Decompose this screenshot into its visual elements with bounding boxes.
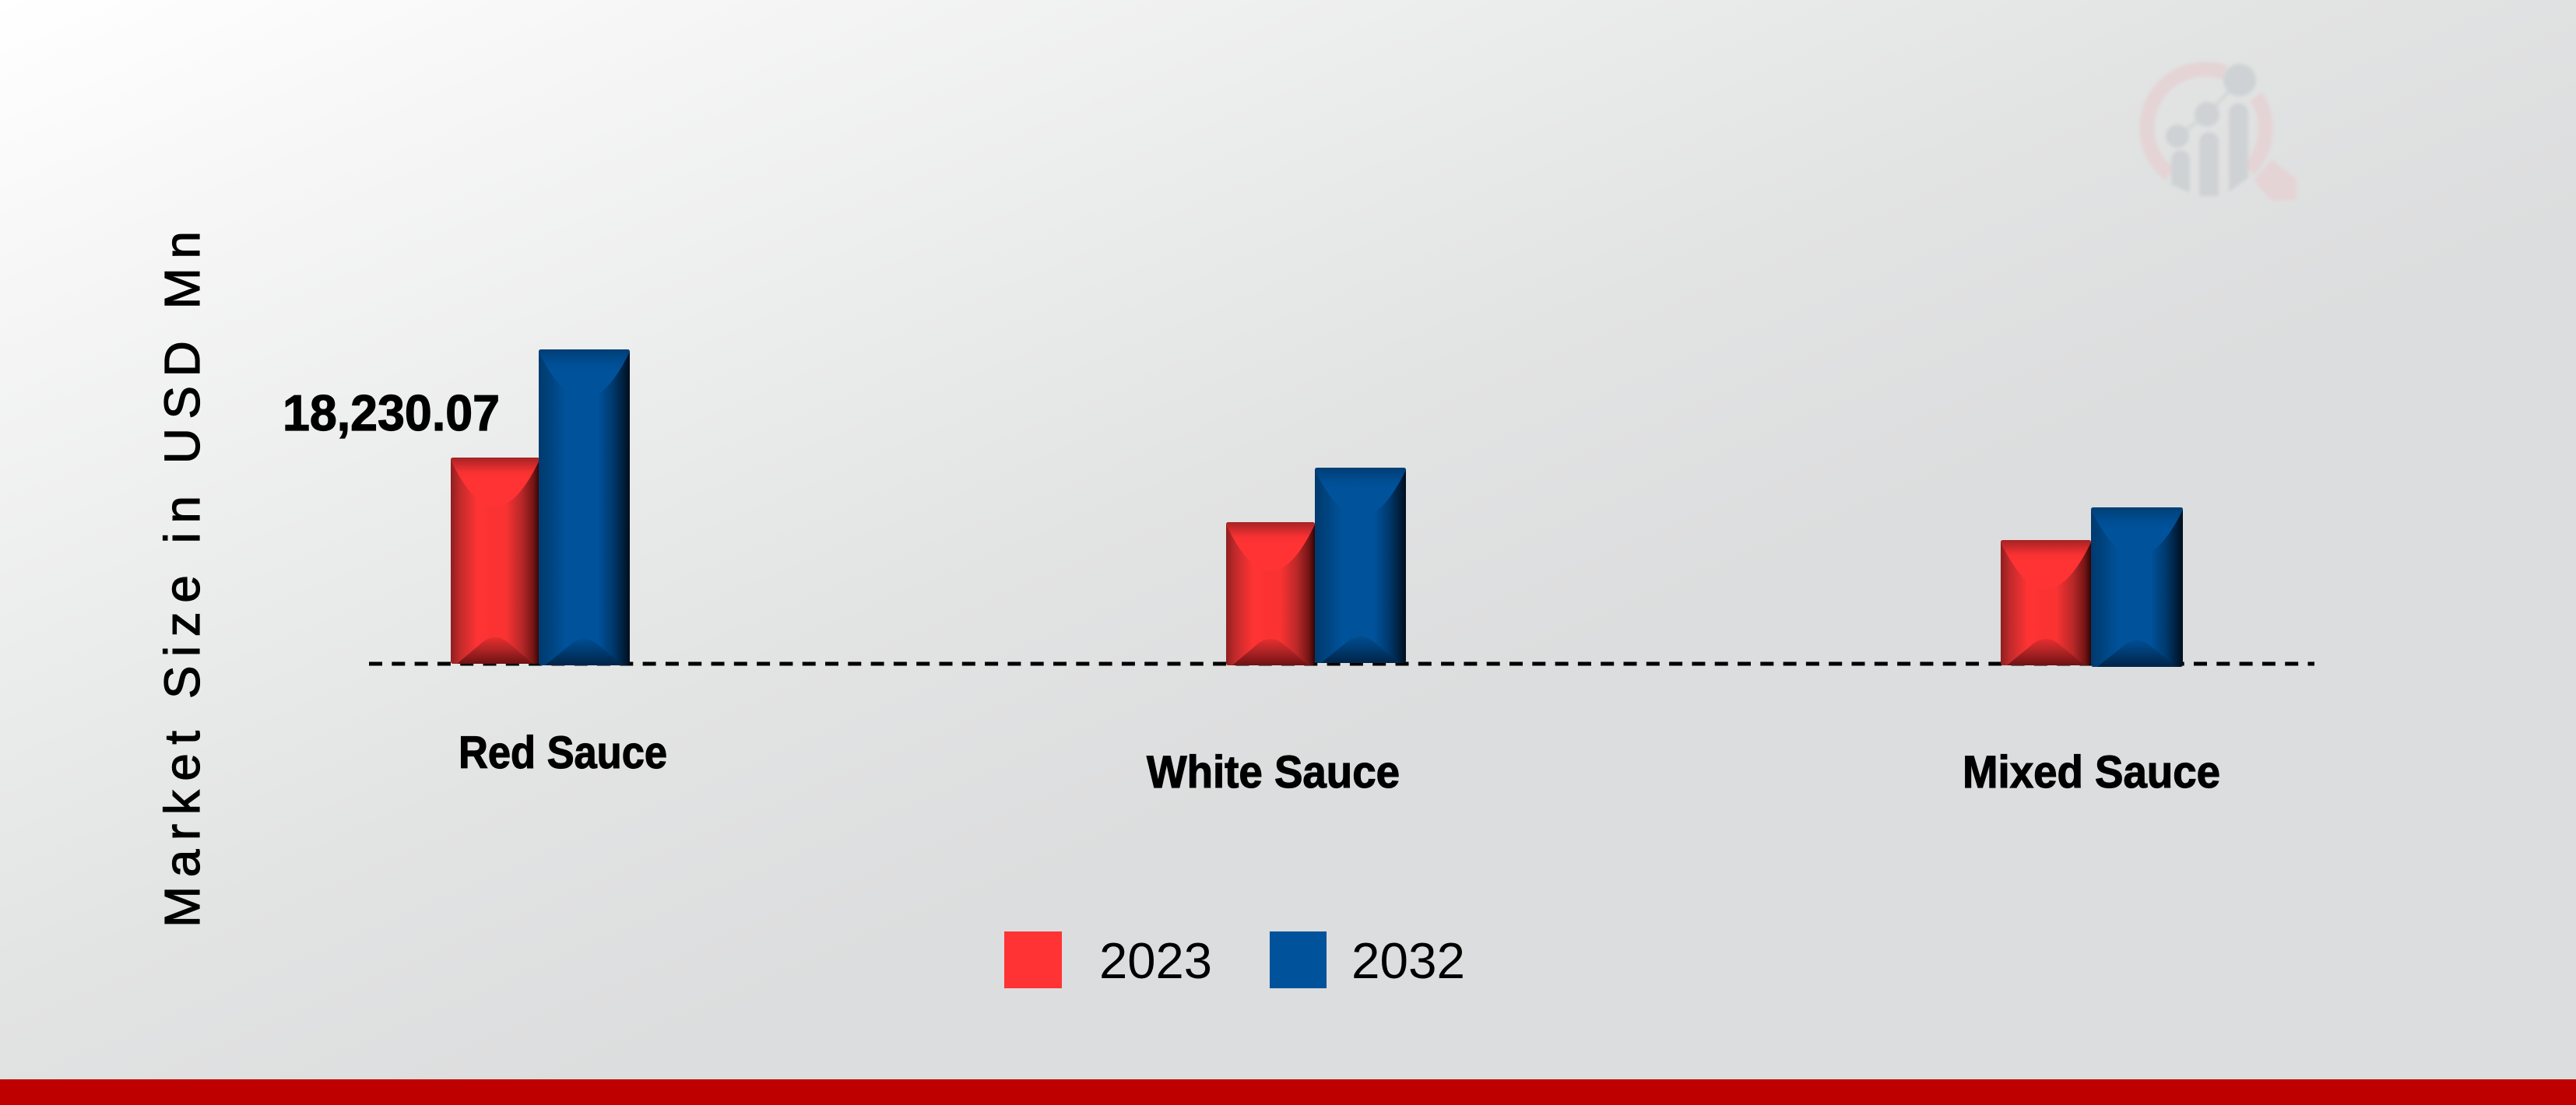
bar: Mixed Sauce 2023 — [2001, 540, 2091, 665]
category label: Red Sauce: Red Sauce — [459, 728, 667, 778]
legend — [1004, 931, 1465, 989]
icon: watermark logo — [2147, 64, 2297, 200]
baseline — [369, 661, 2314, 666]
data label: Red Sauce 2023 value: 18,230.07 — [283, 384, 500, 441]
bar: White Sauce 2032 — [1315, 468, 1406, 663]
legend swatch: 2023 — [1004, 931, 1062, 988]
category label: Mixed Sauce: Mixed Sauce — [1963, 747, 2220, 798]
bar: Mixed Sauce 2032 — [2091, 507, 2183, 667]
legend swatch: 2032 — [1270, 931, 1327, 988]
bar: Red Sauce 2032 — [539, 349, 630, 665]
legend label: 2032: 2032 — [1351, 932, 1465, 989]
category label: White Sauce: White Sauce — [1147, 747, 1400, 798]
footer bar — [0, 1079, 2576, 1105]
bar: Red Sauce 2023 — [451, 458, 539, 664]
bar group: Red Sauce — [451, 349, 630, 665]
y-axis title: Market Size in USD Mn — [154, 231, 210, 928]
legend label: 2023: 2023 — [1099, 932, 1212, 989]
bar group: White Sauce — [1226, 468, 1406, 665]
bar: White Sauce 2023 — [1226, 522, 1315, 665]
bar group: Mixed Sauce — [2001, 507, 2183, 667]
